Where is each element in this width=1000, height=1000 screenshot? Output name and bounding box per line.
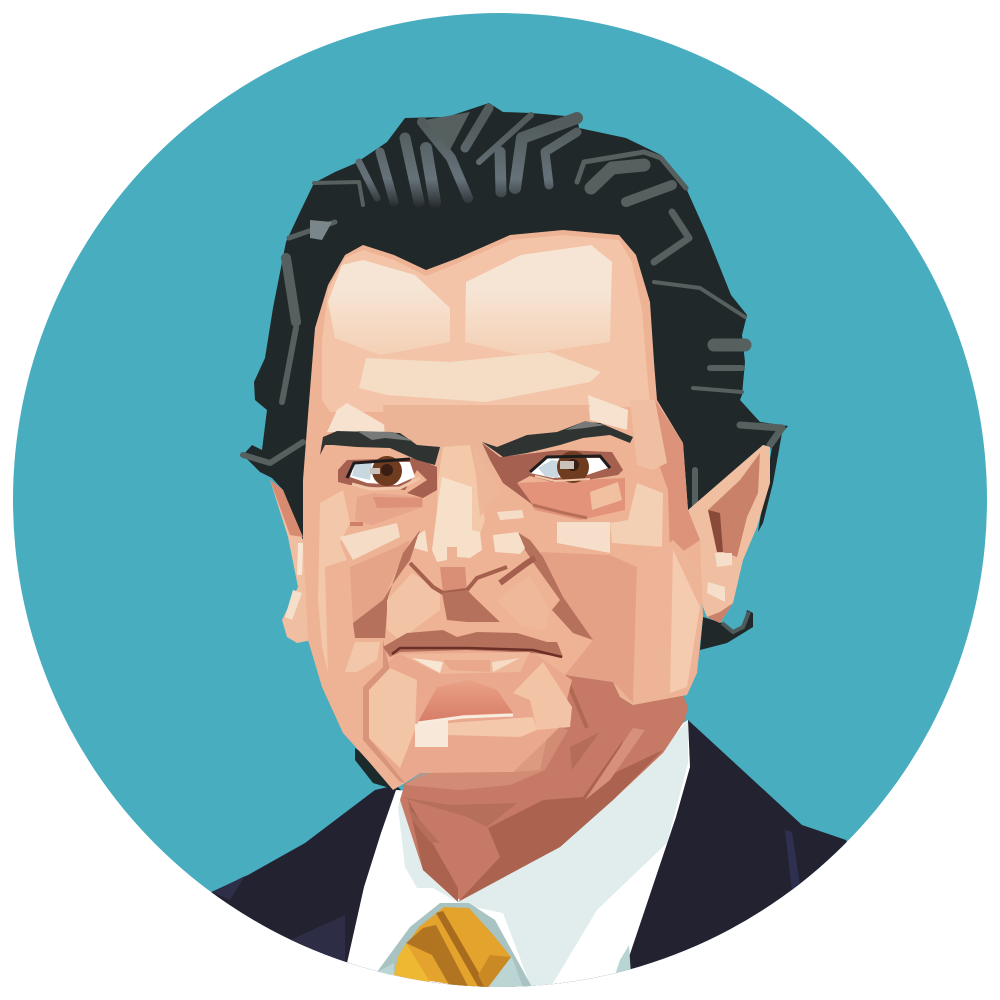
right cheek [540,552,637,703]
under-eye shading [355,493,423,525]
nose tip and philtrum [410,558,535,622]
necktie [377,903,532,990]
left ear [270,480,312,643]
left cheek [350,540,410,623]
left face strip [318,490,350,673]
nose highlight [432,477,482,562]
left and right nose folds [353,530,420,638]
hair behind the jaw [355,748,390,788]
forehead shading [322,235,650,412]
side of face near hair [655,400,700,551]
figure [211,103,847,987]
central brow and nose bridge [383,405,590,432]
hair backing behind the face [318,300,666,416]
right eyebrow [482,421,633,457]
left eyebrow [320,431,440,465]
face [303,230,703,790]
shirt [340,720,690,1000]
cheek beside mouth [387,573,440,640]
right ear [688,445,770,623]
mouth [383,630,563,674]
neck hair curl at right [700,610,753,650]
chin [363,640,572,790]
hair [243,103,788,540]
suit jacket [211,720,847,987]
neck [400,675,688,902]
right eye [482,443,623,505]
forehead highlights [328,260,450,355]
left eye [338,456,437,498]
brow highlights [327,403,384,432]
hair highlights [359,108,577,202]
cheek highlights [340,523,400,560]
